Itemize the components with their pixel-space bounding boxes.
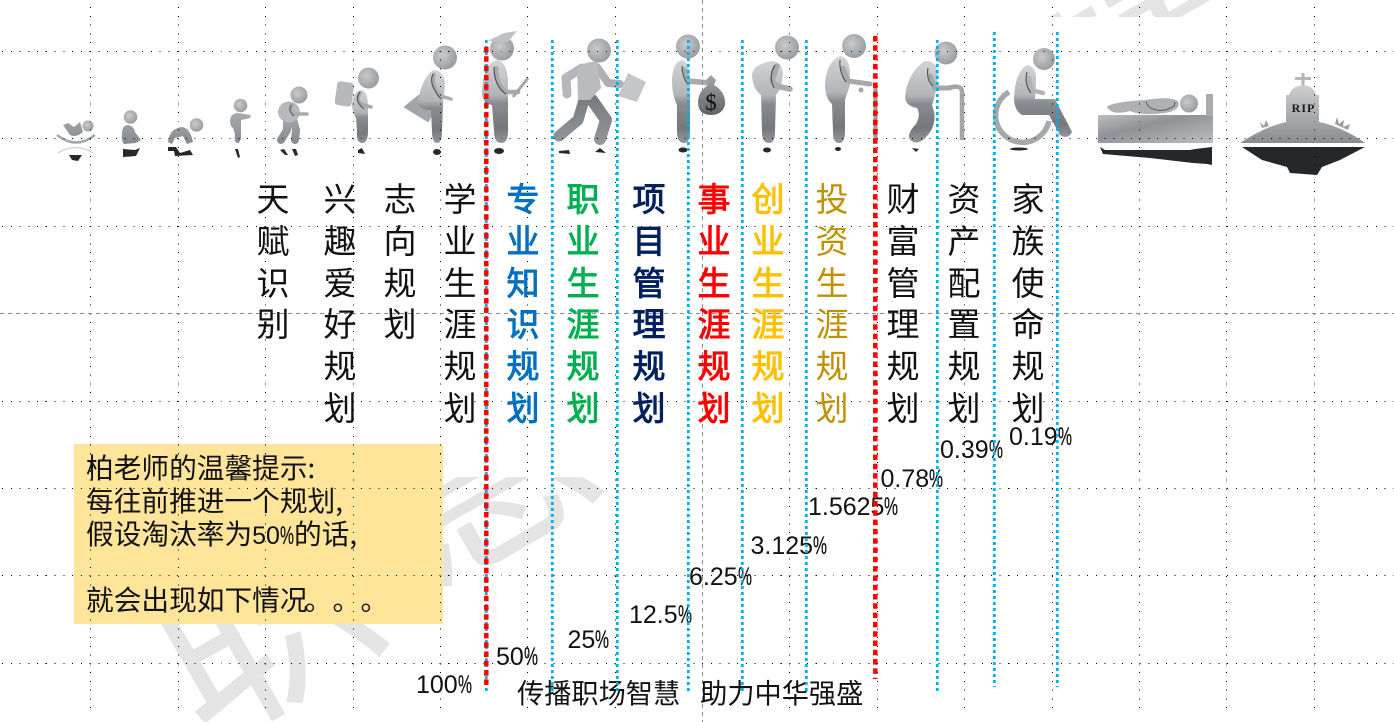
percent 6.25%: %	[738, 563, 752, 591]
column: 投资生涯规划: 生	[816, 257, 848, 305]
column: 天赋识别: 别	[256, 298, 290, 346]
column: 兴趣爱好规划: 爱	[324, 257, 356, 305]
percent 50%: 50	[496, 643, 524, 671]
column: 专业知识规划: 规	[506, 340, 540, 388]
percent 25%: %	[595, 626, 609, 654]
column: 志向规划: 向	[384, 215, 416, 263]
column: 家族使命规划: 使	[1012, 257, 1044, 305]
figure: sitting toddler	[122, 110, 141, 157]
percent 0.19%: %	[1058, 423, 1072, 451]
column: 家族使命规划: 划	[1012, 382, 1044, 430]
column: 天赋识别: 天	[256, 173, 290, 221]
column: 学业生涯规划: 业	[444, 215, 476, 263]
column: 兴趣爱好规划: 划	[324, 382, 356, 430]
column: 志向规划: 规	[384, 257, 416, 305]
column: 资产配置规划: 资	[948, 173, 980, 221]
column: 专业知识规划: 知	[506, 257, 540, 305]
percent 3.125%: %	[813, 532, 827, 560]
callout text: %	[280, 522, 294, 550]
watermark: 慧	[293, 260, 643, 646]
column: 事业生涯规划: 生	[698, 257, 730, 305]
column: 创业生涯规划	[752, 173, 784, 430]
column: 学业生涯规划: 生	[444, 257, 476, 305]
percent 12.5%: 12.5	[629, 601, 678, 629]
column: 学业生涯规划: 规	[444, 340, 476, 388]
column: 职业生涯规划: 生	[566, 257, 600, 305]
percent 0.39%: 0.39	[940, 436, 989, 464]
figure: bed	[1098, 94, 1213, 165]
column: 志向规划: 划	[384, 298, 416, 346]
column: 资产配置规划: 规	[948, 340, 980, 388]
column: 兴趣爱好规划: 规	[324, 340, 356, 388]
column: 创业生涯规划: 涯	[752, 298, 784, 346]
column: 项目管理规划	[632, 173, 666, 430]
figure: student with bag	[405, 46, 457, 155]
figure: baby	[57, 120, 95, 161]
percent 0.78%: 0.78	[880, 465, 929, 493]
column: 项目管理规划: 理	[632, 298, 666, 346]
callout text: 。	[305, 578, 332, 618]
column: 家族使命规划: 家	[1012, 173, 1044, 221]
column: 创业生涯规划: 生	[752, 257, 784, 305]
column: 财富管理规划	[886, 173, 920, 430]
column: 家族使命规划: 命	[1012, 298, 1044, 346]
percent 50%: %	[524, 643, 538, 671]
column: 创业生涯规划: 划	[752, 382, 784, 430]
column: 财富管理规划: 理	[886, 298, 920, 346]
column: 投资生涯规划	[816, 173, 848, 430]
percent 100%: 100	[416, 671, 458, 699]
percent 1.5625%: %	[884, 493, 898, 521]
column: 财富管理规划: 规	[886, 340, 920, 388]
figure: tombstone RIP: RIP	[1292, 101, 1315, 115]
column: 天赋识别	[256, 173, 290, 346]
column: 项目管理规划: 目	[632, 215, 666, 263]
column: 项目管理规划: 项	[632, 173, 666, 221]
figure: child with backpack	[278, 86, 308, 156]
column: 学业生涯规划: 划	[444, 382, 476, 430]
figure: bent man	[752, 36, 799, 152]
figure: man with money bag: $	[705, 90, 717, 115]
callout text: 柏老师的温馨提示: 每往前推进一个规划, 假设淘汰率为50 的话, 就会出现如下情况	[86, 446, 357, 618]
column: 职业生涯规划: 规	[566, 340, 600, 388]
column: 财富管理规划: 管	[886, 257, 920, 305]
column: 职业生涯规划: 划	[566, 382, 600, 430]
callout text: 。	[361, 578, 388, 618]
percent 1.5625%: 1.5625	[808, 493, 884, 521]
figure: crawling toddler	[168, 118, 203, 156]
column: 投资生涯规划: 涯	[816, 298, 848, 346]
column: 职业生涯规划	[566, 173, 600, 430]
percent 0.39%: %	[989, 436, 1003, 464]
column: 职业生涯规划: 业	[566, 215, 600, 263]
percent 0.78%: %	[929, 465, 943, 493]
column: 职业生涯规划: 职	[566, 173, 600, 221]
column: 资产配置规划: 产	[948, 215, 980, 263]
column: 专业知识规划: 识	[506, 298, 540, 346]
slogan: 传播职场智慧 助力中华强盛	[517, 671, 863, 711]
column: 事业生涯规划	[698, 173, 730, 430]
column: 家族使命规划: 规	[1012, 340, 1044, 388]
column: 事业生涯规划: 划	[698, 382, 730, 430]
column: 志向规划	[384, 173, 416, 346]
column: 兴趣爱好规划: 好	[324, 298, 356, 346]
column: 专业知识规划: 专	[506, 173, 540, 221]
column: 项目管理规划: 管	[632, 257, 666, 305]
figure: man with money bag	[672, 34, 725, 152]
column: 创业生涯规划: 业	[752, 215, 784, 263]
figure: standing infant	[230, 99, 251, 158]
callout text: 。	[333, 578, 360, 618]
column: 专业知识规划: 业	[506, 215, 540, 263]
percent 0.19%: 0.19	[1009, 423, 1058, 451]
column: 资产配置规划: 置	[948, 298, 980, 346]
figure: teen with backpack	[334, 68, 379, 154]
callout background	[74, 444, 443, 624]
column: 资产配置规划: 配	[948, 257, 980, 305]
column: 专业知识规划: 划	[506, 382, 540, 430]
column: 财富管理规划: 划	[886, 382, 920, 430]
column: 家族使命规划	[1012, 173, 1044, 430]
column: 学业生涯规划: 学	[444, 173, 476, 221]
column: 创业生涯规划: 规	[752, 340, 784, 388]
percent 3.125%: 3.125	[750, 532, 813, 560]
column: 兴趣爱好规划: 趣	[324, 215, 356, 263]
percent 25%	[568, 626, 609, 654]
column: 财富管理规划: 财	[886, 173, 920, 221]
column: 事业生涯规划: 事	[698, 173, 730, 221]
column: 项目管理规划: 规	[632, 340, 666, 388]
column: 财富管理规划: 富	[886, 215, 920, 263]
column: 投资生涯规划: 划	[816, 382, 848, 430]
watermark	[161, 0, 1210, 722]
percent 100%: %	[458, 671, 472, 699]
column: 项目管理规划: 划	[632, 382, 666, 430]
column: 专业知识规划	[506, 173, 540, 430]
column: 事业生涯规划: 业	[698, 215, 730, 263]
column: 创业生涯规划: 创	[752, 173, 784, 221]
column: 资产配置规划: 划	[948, 382, 980, 430]
column: 事业生涯规划: 涯	[698, 298, 730, 346]
column: 事业生涯规划: 规	[698, 340, 730, 388]
column: 学业生涯规划	[444, 173, 476, 430]
percent 6.25%: 6.25	[689, 563, 738, 591]
column: 兴趣爱好规划: 兴	[324, 173, 356, 221]
column: 资产配置规划	[948, 173, 980, 430]
column: 天赋识别: 赋	[256, 215, 290, 263]
percent 25%: 25	[568, 626, 595, 654]
column: 志向规划: 志	[384, 173, 416, 221]
column: 投资生涯规划: 规	[816, 340, 848, 388]
percent 50%	[496, 643, 538, 671]
column: 家族使命规划: 族	[1012, 215, 1044, 263]
figure: walking professional with folder	[559, 38, 646, 154]
figure: old man	[825, 34, 878, 151]
column: 兴趣爱好规划	[324, 173, 356, 430]
column: 职业生涯规划: 涯	[566, 298, 600, 346]
percent 12.5%: %	[678, 601, 692, 629]
figure: wheelchair	[996, 48, 1072, 150]
figure: tombstone RIP	[1240, 73, 1365, 175]
column: 天赋识别: 识	[256, 257, 290, 305]
column: 投资生涯规划: 资	[816, 215, 848, 263]
figure: graduate	[482, 31, 528, 154]
column: 投资生涯规划: 投	[816, 173, 848, 221]
column: 学业生涯规划: 涯	[444, 298, 476, 346]
figure: man with cane	[905, 42, 962, 152]
